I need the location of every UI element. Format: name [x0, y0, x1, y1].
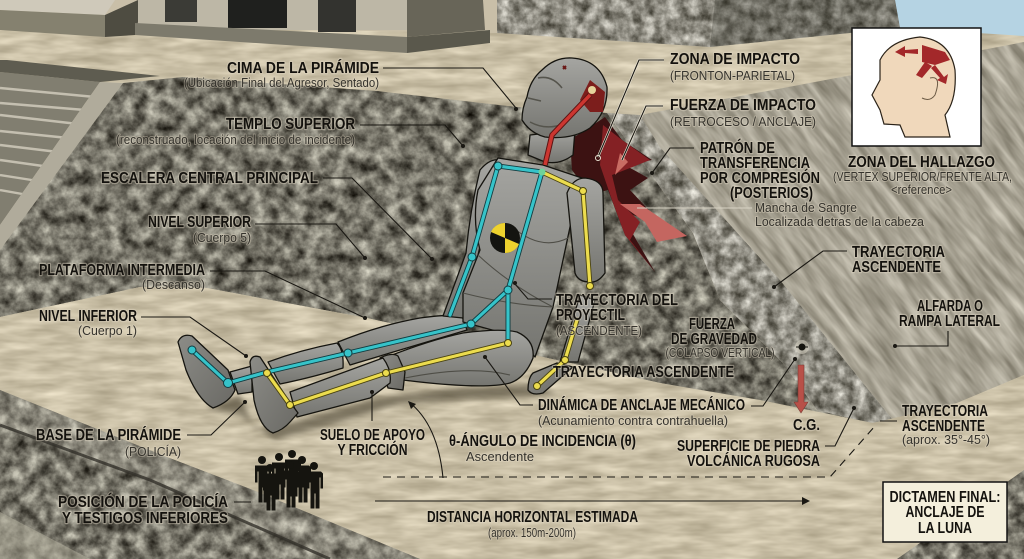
leader: base: [187, 400, 247, 435]
label: nivel inferior: NIVEL INFERIOR: [39, 308, 137, 325]
label: ángulo de incidencia: [449, 433, 636, 464]
far thigh: [338, 315, 467, 365]
label: posición de la policía: [58, 493, 228, 527]
label: plataforma intermedia: (Descanso): [142, 278, 205, 292]
label: templo superior: TEMPLO SUPERIOR: [226, 116, 355, 133]
label: patrón de transferencia: PATRÓN DE: [700, 139, 775, 157]
label: cima de la pirámide: (Ubicación Final del Agresor, Sentado): [184, 76, 379, 90]
label: nivel superior: NIVEL SUPERIOR: [148, 214, 251, 231]
label: plataforma intermedia: [39, 262, 205, 292]
head: [522, 58, 607, 138]
temple and upper rock: [0, 0, 900, 53]
callout: dictamen final: ANCLAJE DE: [906, 504, 984, 521]
leader: escalera: [323, 178, 434, 261]
label: distancia horizontal: [427, 509, 638, 540]
label: ángulo de incidencia: θ-ÁNGULO DE INCIDENCIA (θ): [449, 433, 636, 450]
label: escalera central principal: ESCALERA CENTRAL PRINCIPAL: [101, 170, 318, 187]
label: cima de la pirámide: CIMA DE LA PIRÁMIDE: [227, 60, 379, 77]
ground shadow: [205, 385, 560, 440]
arrow: horizontal distance: [375, 497, 810, 505]
crash test marker: [490, 223, 520, 253]
leader: trayectoria del proyectil: [513, 281, 552, 299]
leader: fuerza de impacto: [622, 106, 663, 160]
label: nivel inferior: (Cuerpo 1): [78, 324, 137, 338]
torso: [463, 158, 588, 357]
yellow skeleton: [264, 168, 594, 408]
label: trayectoria ascendente lower right: ASCENDENTE: [902, 418, 985, 435]
label: base de la pirámide: BASE DE LA PIRÁMIDE: [36, 427, 181, 444]
callout: dictamen final: [883, 482, 1007, 542]
label: templo superior: [116, 116, 355, 147]
label: alfarda: ALFARDA O: [917, 298, 983, 315]
label: templo superior: (reconstruado, locación del inicio de incidente): [116, 133, 355, 147]
label: patrón de transferencia: (POSTERIOS): [730, 185, 813, 202]
leader: dinámica left: [483, 355, 533, 405]
knee: [380, 354, 405, 390]
label: trayectoria ascendente lower right: [902, 403, 990, 447]
label: nivel superior: (Cuerpo 5): [193, 231, 251, 245]
leader: posición: [234, 501, 251, 503]
ear: [922, 78, 938, 99]
leader: zona de impacto: [596, 60, 664, 160]
thigh shading: [405, 371, 510, 378]
label: superficie de piedra: [677, 438, 820, 470]
torso shading: [463, 225, 568, 307]
label: trayectoria del proyectil: PROYECTIL: [556, 307, 625, 324]
arrow: gravity: [794, 365, 808, 413]
leader: trayectoria right: [772, 251, 847, 289]
label: superficie de piedra: VOLCÁNICA RUGOSA: [687, 453, 820, 470]
label: trayectoria ascendente right: ASCENDENTE: [852, 259, 941, 276]
callout: dictamen final: LA LUNA: [918, 520, 972, 537]
leader: dinámica right: [751, 357, 797, 406]
label: suelo de apoyo y fricción: Y FRICCIÓN: [338, 441, 408, 459]
leader: suelo: [370, 390, 374, 421]
leader: alfarda: [893, 331, 948, 348]
label: suelo de apoyo y fricción: SUELO DE APOYO: [320, 427, 425, 444]
label: c.g.: C.G.: [793, 417, 820, 434]
neck: [528, 130, 575, 163]
label: nivel inferior: [39, 308, 137, 338]
leader: mancha: [637, 207, 752, 209]
diagonal stair balustrade: [0, 82, 123, 250]
blood stain behind head: [570, 117, 687, 272]
label: nivel superior: [148, 214, 251, 245]
figure: seated crash-test dummy: [178, 58, 607, 433]
icon: group of witnesses: [255, 450, 323, 510]
label: trayectoria ascendente lower right: TRAYECTORIA: [902, 403, 988, 420]
label: patrón de transferencia: TRANSFERENCIA: [700, 155, 810, 172]
label: trayectoria del proyectil: TRAYECTORIA DEL: [556, 292, 678, 309]
leader: cima: [383, 68, 518, 111]
far shin: [268, 343, 343, 384]
label: posición de la policía: Y TESTIGOS INFERIORES: [62, 510, 228, 527]
lower left rock: [0, 385, 430, 559]
right arm: [567, 178, 605, 282]
label: alfarda: [899, 298, 1000, 330]
label: trayectoria del proyectil: [556, 292, 678, 338]
leader: trayectoria lower right: [880, 420, 897, 422]
cyan skeleton: [188, 162, 542, 388]
inset: head wound diagram: [852, 28, 981, 146]
label: zona del hallazgo: <reference>: [891, 183, 952, 197]
wound arrows: [895, 45, 950, 84]
label: dinámica de anclaje: [538, 397, 745, 428]
upper plaza: [0, 30, 1024, 114]
label: trayectoria ascendente right: [852, 244, 945, 276]
label: superficie de piedra: SUPERFICIE DE PIEDRA: [677, 438, 820, 455]
label: fuerza de gravedad: (COLAPSO VERTICAL): [666, 346, 774, 360]
right hand: [528, 363, 573, 394]
label: dinámica de anclaje: (Acunamiento contra contrahuella): [538, 414, 728, 428]
leader: superficie: [825, 406, 856, 446]
arrow: incidence angle arc: [408, 401, 443, 478]
head profile: [872, 37, 955, 137]
label: patrón de transferencia: POR COMPRESIÓN: [700, 169, 820, 187]
callout: dictamen final: DICTAMEN FINAL:: [890, 489, 1000, 506]
inset frame: [852, 28, 981, 146]
leader: patrón: [650, 148, 694, 175]
label: distancia horizontal: DISTANCIA HORIZONTAL ESTIMADA: [427, 509, 638, 526]
right side ramp: [640, 42, 1024, 420]
face shading: [528, 77, 562, 127]
label: base de la pirámide: (POLICÍA): [125, 444, 181, 459]
label: fuerza de gravedad: FUERZA: [689, 316, 735, 333]
sky: [880, 0, 1024, 40]
label: fuerza de gravedad: [666, 316, 774, 360]
far foot: [178, 335, 235, 408]
icon: center of gravity marker: [795, 340, 809, 354]
label: trayectoria ascendente center: TRAYECTORIA ASCENDENTE: [553, 364, 734, 381]
label: trayectoria ascendente right: TRAYECTORIA: [852, 244, 945, 261]
head wound: [563, 66, 605, 112]
label: zona del hallazgo: [833, 154, 1012, 197]
leader: plataforma: [210, 271, 367, 320]
label: base de la pirámide: [36, 427, 181, 459]
label: mancha de sangre: Mancha de Sangre: [755, 201, 857, 215]
label: mancha de sangre: [755, 201, 924, 229]
label: distancia horizontal: (aprox. 150m-200m): [488, 526, 576, 540]
label: zona del hallazgo: ZONA DEL HALLAZGO: [848, 154, 995, 171]
label: fuerza de impacto: (RETROCESO / ANCLAJE): [670, 115, 816, 129]
label: cima de la pirámide: [184, 60, 379, 90]
label: fuerza de impacto: [670, 97, 816, 129]
label: suelo de apoyo y fricción: [320, 427, 425, 459]
red head trajectory: [545, 95, 590, 165]
leader: nivel inferior: [141, 317, 248, 358]
central rock wall: [0, 77, 855, 420]
dashed trajectory line: [383, 426, 875, 477]
leader: templo: [360, 125, 465, 148]
label: fuerza de impacto: FUERZA DE IMPACTO: [670, 97, 816, 114]
label: zona de impacto: (FRONTON-PARIETAL): [670, 69, 795, 83]
label: patrón de transferencia: [700, 139, 820, 202]
label: zona de impacto: ZONA DE IMPACTO: [670, 51, 800, 68]
left arm: [443, 160, 500, 318]
label: trayectoria del proyectil: (ASCENDENTE): [556, 324, 642, 338]
lighter granite strip: [608, 113, 892, 422]
near foot: [250, 356, 298, 433]
label: dinámica de anclaje: DINÁMICA DE ANCLAJE MECÁNICO: [538, 397, 745, 414]
label: zona de impacto: [670, 51, 800, 83]
near shin: [290, 358, 390, 417]
stairs: [0, 60, 160, 225]
right forearm: [560, 295, 595, 362]
near thigh: [387, 330, 533, 386]
label: mancha de sangre: Localizada detras de la cabeza: [755, 215, 924, 229]
leader: nivel superior: [255, 224, 367, 260]
label: trayectoria ascendente lower right: (aprox. 35°-45°): [902, 433, 990, 447]
lower right rock: [897, 470, 1024, 559]
label: ángulo de incidencia: Ascendente: [466, 450, 534, 464]
lower floor: [0, 280, 1024, 559]
far ankle: [230, 366, 252, 394]
label: plataforma intermedia: PLATAFORMA INTERMEDIA: [39, 262, 205, 279]
label: posición de la policía: POSICIÓN DE LA POLICÍA: [58, 493, 228, 511]
label: fuerza de gravedad: DE GRAVEDAD: [671, 331, 757, 348]
